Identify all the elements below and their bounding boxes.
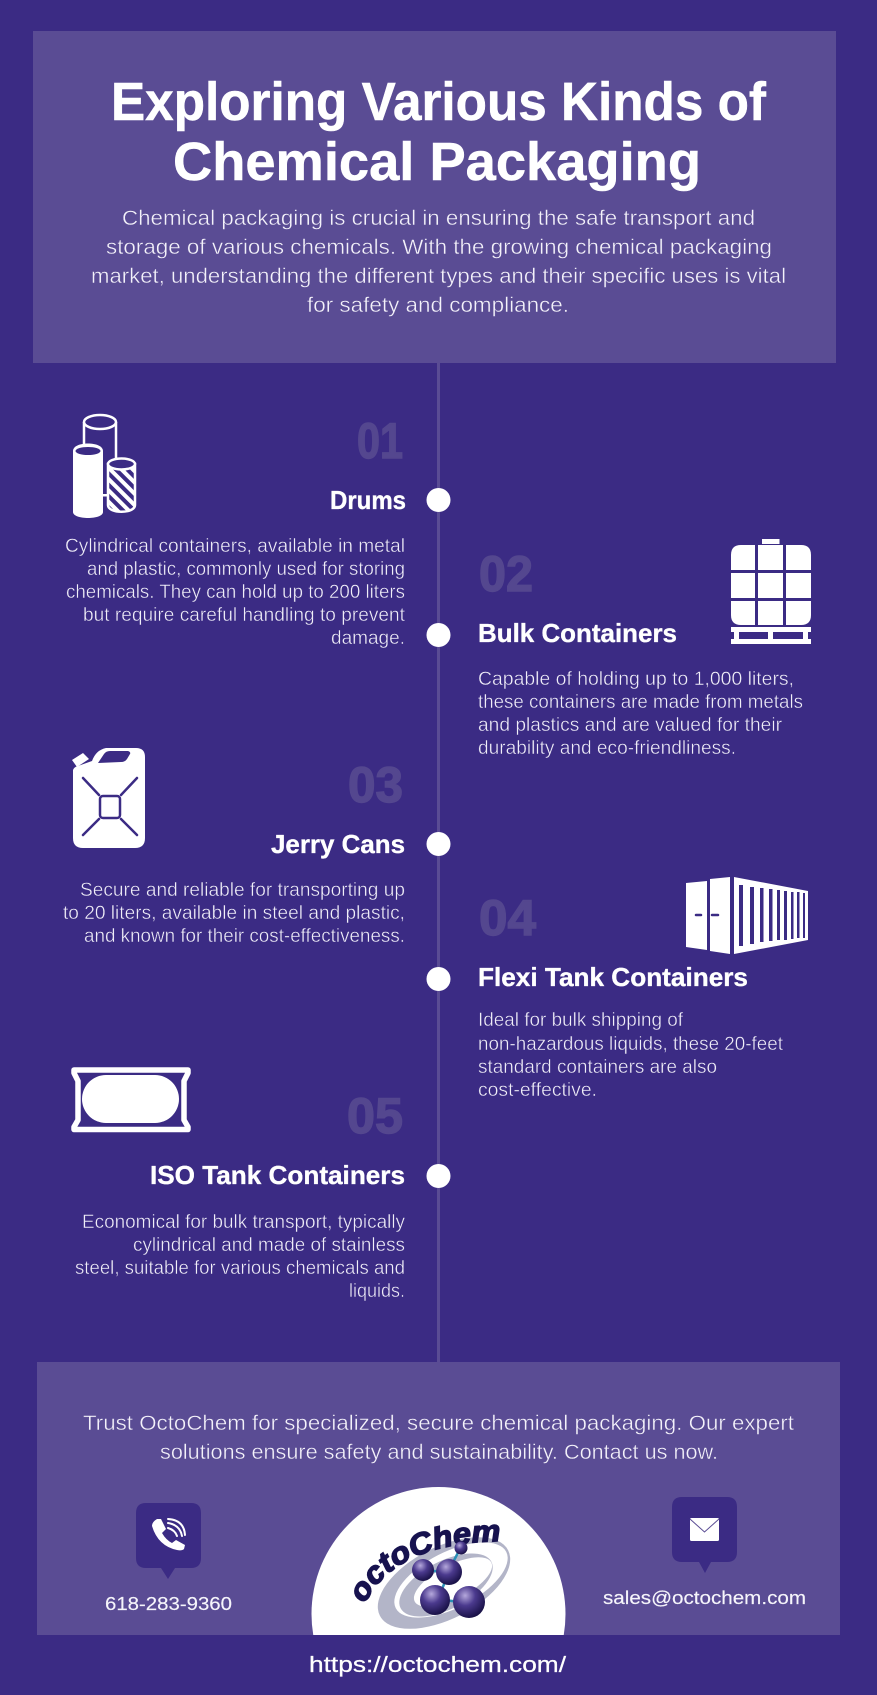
text: Flexi Tank Containers description: non-hazardous liquids, these 20-feet [478,1034,784,1055]
intro text: Chemical packaging is crucial in ensuring the safe transport and [122,207,755,230]
text: Jerry Cans description: Secure and reliable for transporting up [80,880,405,901]
text: Flexi Tank Containers description: Ideal for bulk shipping of [478,1010,684,1031]
email address: sales@octochem.com [603,1588,806,1608]
logo wordmark: octoChem [354,1524,500,1602]
call to action text: Trust OctoChem for specialized, secure chemical packaging. Our expert [83,1412,794,1435]
section 04: Flexi Tank Containers [426,877,808,1101]
intro text: market, understanding the different types and their specific uses is vital [91,265,786,288]
logo swirl [364,1518,524,1648]
website URL: https://octochem.com/ [309,1652,567,1677]
text: Bulk Containers description: Capable of holding up to 1,000 liters, [478,669,794,690]
phone number: 618-283-9360 [105,1594,232,1614]
text: Flexi Tank Containers description [478,1010,784,1101]
timeline dot 02 [426,623,450,647]
number 03: 03 [348,757,403,813]
timeline line [437,363,440,1362]
text: Drums description: and plastic, commonly used for storing [87,559,405,580]
icon: drums [73,415,135,518]
text: Flexi Tank Containers description: standard containers are also [478,1057,717,1078]
text: Jerry Cans description: and known for their cost-effectiveness. [84,926,405,947]
text: Bulk Containers description [478,669,803,759]
intro text: for safety and compliance. [307,294,569,317]
icon: ISO tank [74,1070,188,1130]
text: ISO Tank Containers description: liquids. [349,1281,405,1302]
logo molecule [412,1542,485,1618]
heading: Jerry Cans: Jerry Cans [271,829,405,859]
call to action text [83,1412,794,1464]
text: ISO Tank Containers description: Economical for bulk transport, typically [82,1212,405,1233]
icon: mail bubble [672,1497,737,1573]
text: Bulk Containers description: these containers are made from metals [478,692,803,713]
text: Drums description [65,536,406,649]
text: Drums description: but require careful handling to prevent [83,605,406,626]
text: ISO Tank Containers description: cylindrical and made of stainless [133,1235,405,1256]
section 03: Jerry Cans [63,748,450,947]
section 05: ISO Tank Containers [74,1070,450,1302]
number 04: 04 [479,890,536,946]
icon: phone bubble [136,1503,201,1579]
heading: Flexi Tank Containers: Flexi Tank Containers [478,962,748,992]
panel: contact [37,1362,840,1635]
text: Jerry Cans description: to 20 liters, available in steel and plastic, [63,903,405,924]
timeline dot 05 [426,1164,450,1188]
logo: OctoChem [312,1487,566,1635]
text: ISO Tank Containers description: steel, suitable for various chemicals and [75,1258,405,1279]
text: Drums description: chemicals. They can hold up to 200 liters [66,582,405,603]
title [111,72,767,192]
text: Drums description: Cylindrical containers, available in metal [65,536,405,557]
heading: ISO Tank Containers: ISO Tank Containers [150,1160,405,1190]
heading: Bulk Containers: Bulk Containers [478,618,677,648]
text: Jerry Cans description [63,880,405,947]
timeline dot 03 [426,832,450,856]
panel: header [33,31,836,363]
number 01: 01 [357,413,403,469]
section 01: Drums [65,413,450,649]
section 02: Bulk Containers [426,539,811,759]
text: Drums description: damage. [331,628,405,649]
text: Bulk Containers description: durability and eco-friendliness. [478,738,736,759]
text: Flexi Tank Containers description: cost-effective. [478,1080,597,1101]
title: Exploring Various Kinds of [111,72,767,132]
icon: shipping container [686,877,808,954]
number 05: 05 [347,1088,403,1144]
icon: bulk container [731,539,811,644]
intro text [91,207,786,317]
number 02: 02 [479,546,533,602]
title: Chemical Packaging [173,132,701,192]
text: Bulk Containers description: and plastics and are valued for their [478,715,783,736]
text: ISO Tank Containers description [75,1212,405,1302]
call to action text: solutions ensure safety and sustainability. Contact us now. [160,1441,718,1464]
intro text: storage of various chemicals. With the growing chemical packaging [106,236,772,259]
timeline dot 04 [426,967,450,991]
icon: jerry can [72,748,145,848]
timeline dot 01 [426,488,450,512]
heading: Drums: Drums [330,485,406,515]
